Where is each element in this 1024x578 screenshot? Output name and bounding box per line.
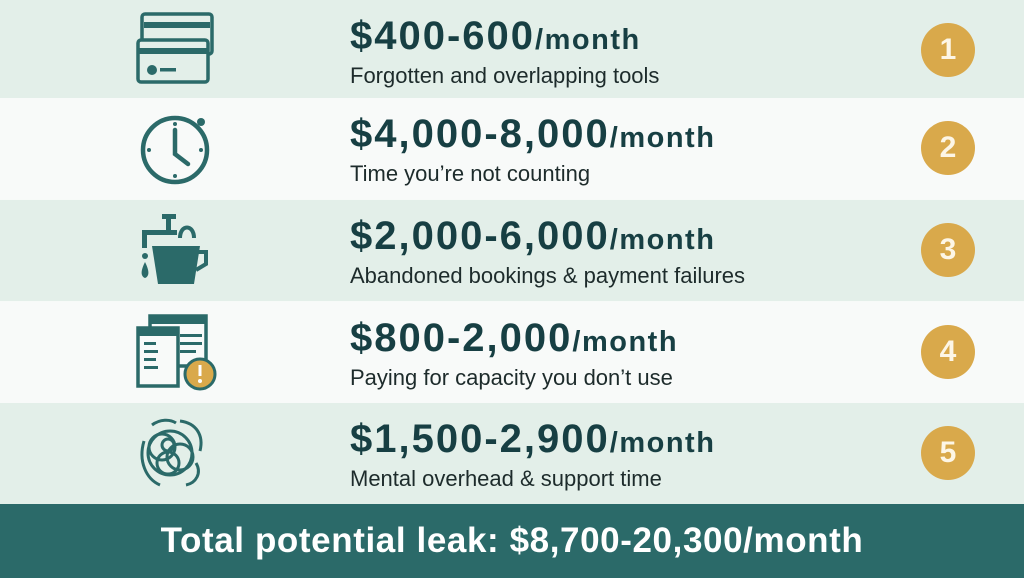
row 1: tools	[0, 0, 1024, 101]
row 3: bookings	[0, 200, 1024, 301]
text block 1: Forgotten and overlapping tools	[350, 63, 659, 88]
badge 4	[921, 325, 975, 379]
row 2: time	[0, 98, 1024, 199]
text block 5: $1,500-2,900/month	[350, 417, 715, 461]
text block 3	[350, 214, 745, 288]
text block 2: Time you’re not counting	[350, 161, 590, 186]
badge 4: 4	[940, 335, 956, 368]
badge 2: 2	[940, 131, 956, 164]
badge 1: 1	[940, 33, 956, 66]
badge 3	[921, 223, 975, 277]
footer total	[0, 504, 1024, 578]
icon: documents with warning	[136, 314, 216, 390]
badge 5: 5	[940, 436, 956, 469]
badge 3: 3	[940, 233, 956, 266]
icon: stopwatch	[140, 116, 210, 184]
text block 3: $2,000-6,000/month	[350, 214, 715, 258]
icon: leaking tap and cup	[142, 214, 208, 284]
row 5: overhead	[0, 403, 1024, 504]
icon: tangled lines	[140, 418, 203, 486]
text block 5	[350, 417, 715, 491]
badge 5	[921, 426, 975, 480]
text block 2: $4,000-8,000/month	[350, 112, 715, 156]
text block 4	[350, 316, 678, 390]
text block 3: Abandoned bookings & payment failures	[350, 263, 745, 288]
badge 2	[921, 121, 975, 175]
footer total: Total potential leak: $8,700-20,300/month	[161, 521, 863, 560]
text block 4: Paying for capacity you don’t use	[350, 365, 673, 390]
text block 1: $400-600/month	[350, 14, 641, 58]
text block 2	[350, 112, 715, 186]
badge 1	[921, 23, 975, 77]
text block 1	[350, 14, 659, 88]
icon: credit cards	[136, 12, 214, 84]
row 4: capacity	[0, 302, 1024, 403]
text block 5: Mental overhead & support time	[350, 466, 662, 491]
text block 4: $800-2,000/month	[350, 316, 678, 360]
